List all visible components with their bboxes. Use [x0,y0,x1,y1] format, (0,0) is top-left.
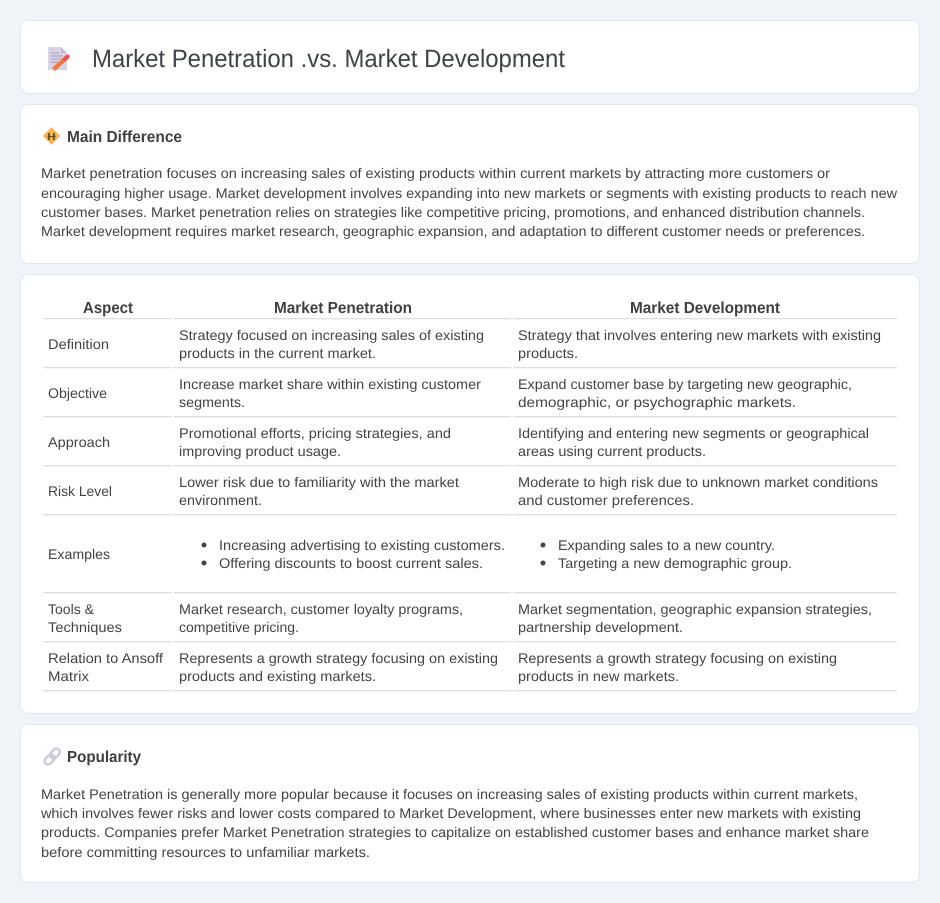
heading: main difference: Main Difference [67,129,182,146]
row: relation to ansoff matrix: Represents a growth strategy focusing on existing [518,650,837,666]
row: objective: Increase market share within existing customer [179,376,481,392]
row: risk level: Risk Level [48,483,112,499]
table header: Market Development [630,300,781,317]
popularity text: products. Companies prefer Market Penetration strategies to capitalize on established customer bases and enhance market share [41,824,869,840]
popularity text: Market Penetration is generally more popular because it focuses on increasing sales of existing products within current markets, [41,786,858,802]
table row lines [43,318,897,691]
icon: document with pencil [48,47,68,70]
row: approach: Approach [48,434,110,450]
row: approach: areas using current products. [518,443,706,459]
row: tools and techniques [48,601,872,635]
table header [83,300,781,317]
row: approach: Promotional efforts, pricing strategies, and [179,425,451,441]
row: objective: Expand customer base by targeting new geographic, [518,376,852,392]
row: risk level: Lower risk due to familiarity with the market [179,474,459,490]
row: tools and techniques: Market research, customer loyalty programs, [179,601,463,617]
main difference text: encouraging higher usage. Market development involves expanding into new markets or segments with existing products to reach new [41,185,898,201]
row: relation to ansoff matrix: Matrix [48,668,89,684]
popularity text [40,786,869,860]
row: tools and techniques: Tools & [48,601,95,617]
row: tools and techniques: Market segmentation, geographic expansion strategies, [518,601,872,617]
row: objective: demographic, or psychographic markets. [518,394,796,410]
panel: main difference [20,104,920,264]
row: definition: products in the current market. [179,345,376,361]
main difference text: customer bases. Market penetration relies on strategies like competitive pricing, promotions, and enhanced distribution channels. [41,204,865,220]
row: tools and techniques: competitive pricing. [179,619,299,635]
row: risk level: and customer preferences. [518,492,694,508]
row: examples: Examples [48,546,110,562]
main difference text [41,165,898,239]
panel: comparison table [20,274,920,714]
row: objective [48,376,852,410]
panel: popularity [20,724,920,882]
row: relation to ansoff matrix: products and existing markets. [179,668,376,684]
icon: link [43,747,61,766]
row: examples: Targeting a new demographic group. [558,555,792,571]
popularity text: which involves fewer risks and lower costs compared to Market Development, where businesses enter new markets with existing [40,805,861,821]
row: risk level [48,474,878,508]
popularity text: before committing resources to unfamiliar markets. [41,844,370,860]
row: risk level: environment. [179,492,262,508]
row: approach: Identifying and entering new segments or geographical [518,425,869,441]
row: definition: Strategy that involves entering new markets with existing [518,327,881,343]
heading: popularity: Popularity [67,749,141,766]
icon: diamond sign [44,128,60,144]
row: relation to ansoff matrix: Relation to Ansoff [48,650,163,666]
table header: Aspect [83,300,134,317]
row: examples: Expanding sales to a new country. [558,537,775,553]
panel: title [20,20,920,94]
row: approach [48,425,869,459]
row: examples: Increasing advertising to existing customers. [219,537,505,553]
row: definition: Strategy focused on increasing sales of existing [179,327,484,343]
row: relation to ansoff matrix: Represents a growth strategy focusing on existing [179,650,498,666]
main difference text: Market development requires market research, geographic expansion, and adaptation to different customer needs or preferences. [41,223,865,239]
row: approach: improving product usage. [179,443,341,459]
row: tools and techniques: Techniques [48,619,122,635]
row: definition: products. [518,345,578,361]
row: definition [48,327,881,361]
row: examples: Offering discounts to boost current sales. [219,555,483,571]
row: risk level: Moderate to high risk due to unknown market conditions [518,474,878,490]
row: examples [48,537,792,571]
main difference text: Market penetration focuses on increasing sales of existing products within current markets by attracting more customers or [41,165,830,181]
row: objective: segments. [179,394,245,410]
row: tools and techniques: partnership development. [518,619,683,635]
row: objective: Objective [48,385,107,401]
row: definition: Definition [48,336,109,352]
title text: Market Penetration .vs. Market Development [92,45,565,73]
table header: Market Penetration [274,300,412,317]
row: relation to ansoff matrix: products in new markets. [518,668,679,684]
row: relation to ansoff matrix [48,650,837,684]
